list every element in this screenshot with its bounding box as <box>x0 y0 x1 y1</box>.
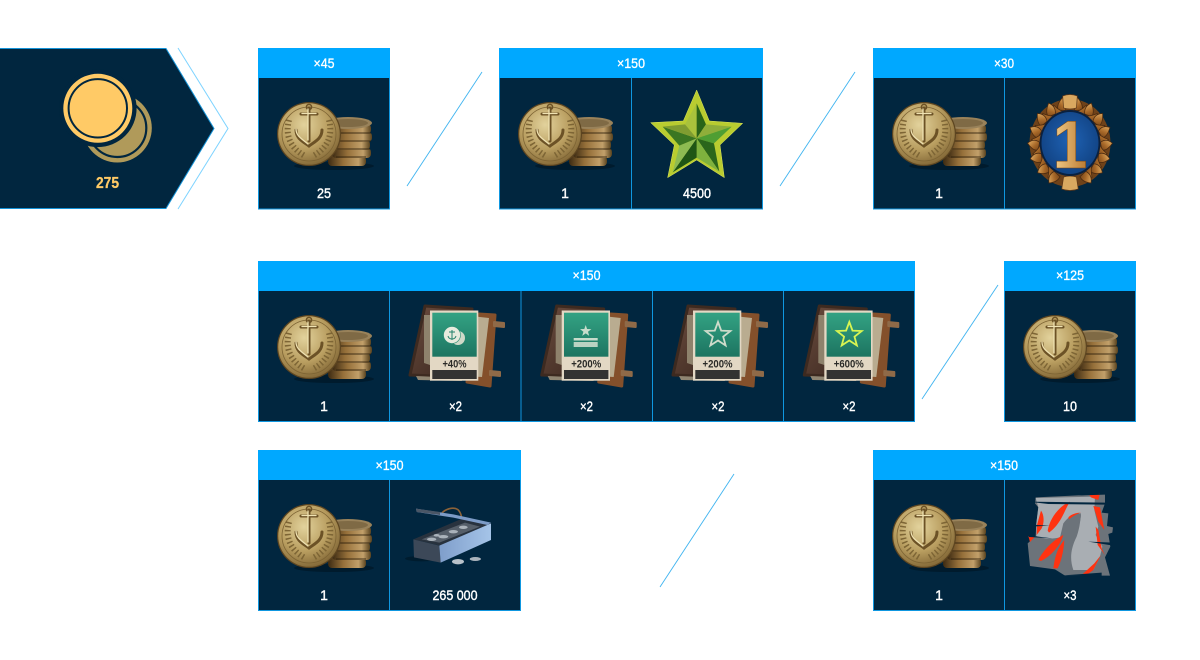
label 25: 25 <box>317 185 331 201</box>
header x150 <box>258 261 915 291</box>
label 4500: 4500 <box>683 185 711 201</box>
label 1: 1 <box>320 398 328 414</box>
header x150: ×150 <box>990 458 1018 473</box>
icon: coin stack <box>518 102 615 170</box>
panel: x150 coin and four signal books <box>258 261 915 422</box>
arrow outline <box>178 48 228 209</box>
icon: laurel medal <box>1027 94 1113 190</box>
icon: book +40%: +40% <box>442 358 467 370</box>
panel: x45 coins <box>258 48 390 209</box>
icon: laurel medal: 1 <box>1053 107 1087 183</box>
label x2: ×2 <box>580 398 593 414</box>
icon: book +40% <box>410 306 504 386</box>
icon: book +200% star <box>673 306 767 386</box>
icon: book +600% star: +600% <box>834 358 864 370</box>
icon: green star <box>651 90 743 178</box>
label 1: 1 <box>935 185 943 201</box>
amount: 275: 275 <box>96 175 119 192</box>
header x150: ×150 <box>572 268 600 283</box>
header x150: ×150 <box>376 458 404 473</box>
label x2: ×2 <box>712 398 725 414</box>
header x45 <box>258 48 390 78</box>
header x30 <box>873 48 1136 78</box>
icon: book +200% rank <box>542 306 636 386</box>
header x150 <box>499 48 763 78</box>
icon: coin stack <box>1023 315 1120 383</box>
slash divider <box>780 72 855 186</box>
label 1: 1 <box>320 587 328 603</box>
icon: gold coins <box>59 70 152 162</box>
icon: camouflage pattern <box>1028 493 1113 577</box>
icon: book +200% rank: +200% <box>571 358 601 370</box>
label 265 000: 265 000 <box>432 587 478 603</box>
label x3: ×3 <box>1064 587 1077 603</box>
label x2: ×2 <box>842 398 856 414</box>
icon: book +600% star <box>804 306 898 386</box>
panel: currency arrow <box>0 48 214 208</box>
label 1: 1 <box>561 185 569 201</box>
header x125 <box>1004 261 1136 291</box>
panel: x125 coins <box>1004 261 1136 422</box>
icon: coin stack <box>892 504 989 572</box>
header x150 <box>258 450 521 480</box>
icon: credits box <box>405 508 491 564</box>
icon: coin stack <box>277 504 374 572</box>
panel: x150 coin and camouflage <box>873 450 1136 611</box>
slash divider <box>922 285 998 399</box>
icon: coin stack <box>892 102 989 170</box>
header x125: ×125 <box>1056 268 1084 283</box>
header x45: ×45 <box>314 56 334 71</box>
panel: x150 coin and star <box>499 48 763 209</box>
header x30: ×30 <box>994 56 1014 71</box>
icon: coin stack <box>277 315 374 383</box>
header x150 <box>873 450 1136 480</box>
slash divider <box>407 72 482 186</box>
label 1: 1 <box>935 587 943 603</box>
panel: x30 coin and medal <box>873 48 1136 209</box>
label 10: 10 <box>1063 398 1077 414</box>
icon: coin stack <box>277 102 374 170</box>
slash divider <box>660 474 734 587</box>
icon: book +200% star: +200% <box>702 358 733 370</box>
panel: x150 coin and credits box <box>258 450 521 611</box>
label x2: ×2 <box>449 398 462 414</box>
header x150: ×150 <box>617 56 645 71</box>
